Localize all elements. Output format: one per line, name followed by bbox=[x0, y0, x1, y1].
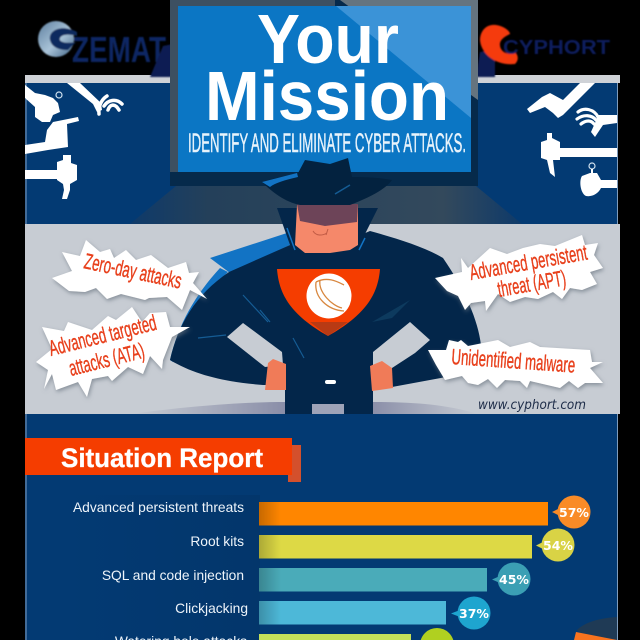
icon: hand with knife bbox=[25, 155, 77, 199]
pie chart fragment bbox=[574, 617, 617, 640]
laptop screen with title bbox=[170, 0, 478, 186]
bar: SQL and code injection 45%: 45% bbox=[499, 572, 529, 587]
belt buckle bbox=[325, 380, 336, 384]
heading: Your Mission: Your bbox=[257, 0, 399, 78]
callout text bbox=[46, 310, 159, 381]
background panel: navy header bbox=[25, 83, 618, 224]
bar: Advanced persistent threats 57%: 57% bbox=[559, 505, 589, 520]
screen bbox=[178, 6, 471, 172]
bar: Root kits 54%: 54% bbox=[543, 538, 573, 553]
logo: left partner bbox=[38, 21, 173, 77]
callout: Advanced persistent threat (APT) bbox=[435, 235, 603, 311]
callout text: threat (APT) bbox=[496, 265, 568, 302]
chest shade bbox=[285, 300, 410, 322]
callout: Zero-day attacks bbox=[52, 240, 207, 310]
callout: Advanced targeted attacks (ATA) bbox=[36, 307, 190, 397]
bar: Advanced persistent threats 57% bbox=[259, 496, 590, 528]
row labels: Root kits bbox=[190, 534, 244, 549]
website url: www.cyphort.com bbox=[478, 398, 586, 413]
bar chart bbox=[73, 496, 590, 640]
row labels: SQL and code injection bbox=[102, 568, 244, 583]
row labels: Advanced persistent threats bbox=[73, 500, 244, 515]
face bbox=[295, 205, 358, 253]
laptop bezel bbox=[170, 0, 478, 186]
icon: hand with knife, right bbox=[541, 133, 617, 177]
collar highlight bbox=[287, 228, 365, 250]
bar: Clickjacking 37% bbox=[259, 596, 490, 630]
logo: Cyphort bbox=[476, 25, 610, 77]
callout: Unidentified malware bbox=[428, 340, 603, 388]
heading: Your Mission bbox=[205, 0, 449, 135]
row labels: Clickjacking bbox=[175, 601, 248, 616]
arm gap bbox=[227, 323, 283, 367]
muscle highlights bbox=[198, 295, 304, 358]
face shadow bbox=[297, 204, 358, 226]
keyboard perspective bbox=[130, 186, 522, 224]
ground shadow right bbox=[371, 402, 478, 414]
heading: Situation Report: Situation Report bbox=[61, 443, 263, 473]
bar: Watering hole attacks bbox=[259, 628, 454, 640]
ground shadow bbox=[130, 402, 285, 414]
icon: hand with key, right bbox=[580, 163, 617, 196]
bar: Root kits 54% bbox=[259, 528, 574, 562]
icons: right hands with weapons bbox=[527, 83, 617, 196]
icon: hand with wrench, right bbox=[577, 109, 617, 137]
shield emblem bbox=[306, 274, 352, 318]
heading: Your Mission: Mission bbox=[205, 57, 449, 135]
icon: hand with gun bbox=[25, 117, 79, 154]
callout text bbox=[468, 240, 589, 302]
cape edge bbox=[170, 268, 228, 362]
callout: Zero-day attacks: Zero-day attacks bbox=[82, 248, 184, 293]
cape bbox=[210, 233, 290, 273]
icon: hand with gun, right bbox=[527, 83, 595, 118]
icon: hand with wrench bbox=[67, 83, 122, 114]
row labels bbox=[73, 500, 248, 640]
left fist bbox=[265, 359, 286, 390]
bar: Clickjacking 37%: 37% bbox=[459, 606, 489, 621]
hat band highlight bbox=[335, 185, 350, 194]
callout text: Advanced targeted bbox=[46, 310, 159, 361]
icon: hand with key bbox=[25, 85, 62, 122]
right fist bbox=[370, 361, 393, 391]
panel: gray hero bbox=[25, 224, 620, 414]
bar: SQL and code injection 45% bbox=[259, 562, 530, 596]
hat brim highlight bbox=[262, 173, 298, 187]
icons: left hands with weapons bbox=[25, 83, 122, 199]
chest shield bbox=[277, 269, 380, 336]
hat bbox=[262, 158, 392, 205]
background panel: navy report section bbox=[25, 414, 618, 640]
collar bbox=[277, 208, 378, 254]
character: hero in hat bbox=[170, 158, 481, 414]
heading: Situation Report bbox=[25, 438, 301, 482]
logo: left partner: ZEMAT bbox=[72, 29, 166, 70]
label shading bbox=[70, 495, 260, 640]
body bbox=[170, 231, 481, 414]
crotch gap bbox=[312, 404, 344, 414]
logo: Cyphort: CYPHORT bbox=[503, 37, 610, 59]
top gray band bbox=[25, 75, 620, 83]
callout text: attacks (ATA) bbox=[66, 338, 147, 381]
